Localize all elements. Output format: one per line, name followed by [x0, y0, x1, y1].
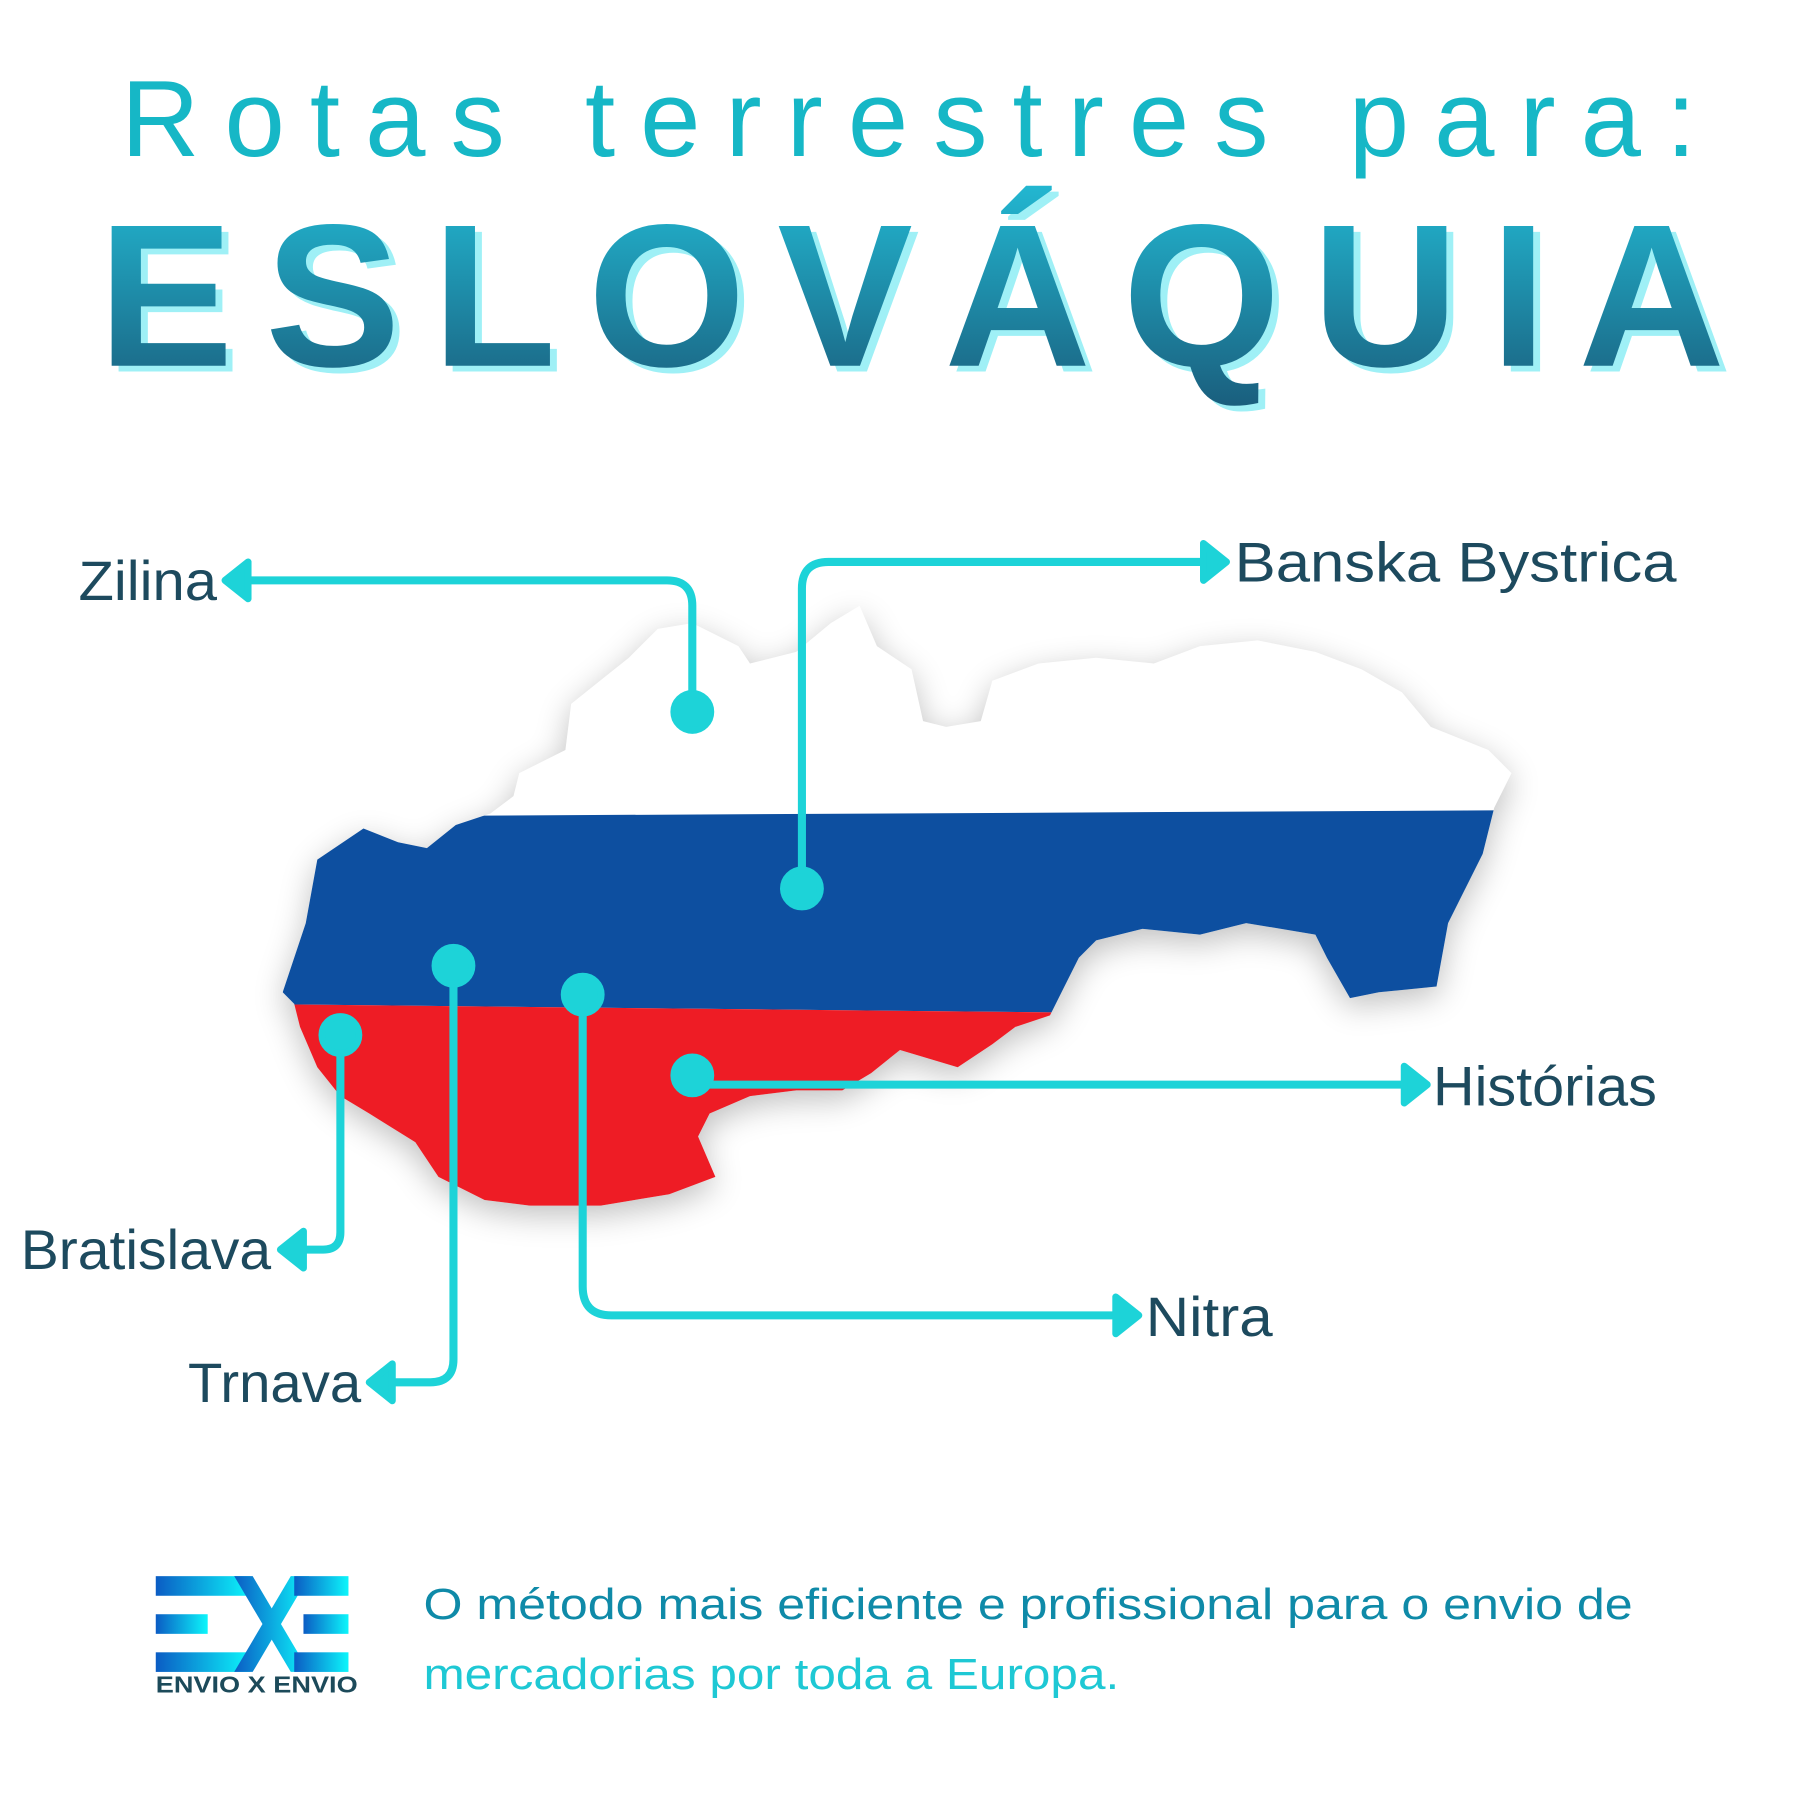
line: Banska Bystrica	[802, 562, 1206, 888]
labels: Nitra	[1146, 1286, 1273, 1348]
footer text	[423, 1580, 1633, 1699]
labels: Trnava	[188, 1352, 361, 1414]
labels: Zilina	[78, 550, 217, 612]
labels: Banska Bystrica	[1235, 532, 1677, 594]
footer text: O método mais eficiente e profissional para o envio de	[423, 1580, 1633, 1629]
labels	[21, 532, 1677, 1414]
logo: ENVIO X ENVIO	[156, 1672, 358, 1698]
labels: Bratislava	[21, 1219, 271, 1281]
line: Zilina	[248, 580, 692, 712]
line: Nitra	[583, 995, 1119, 1315]
labels: Histórias	[1433, 1055, 1657, 1117]
title line 1: Rotas terrestres para:	[121, 58, 1696, 179]
title main: ESLOVÁQUIA	[105, 189, 1732, 416]
footer text: mercadorias por toda a Europa.	[423, 1650, 1119, 1699]
title main: ESLOVÁQUIA	[98, 183, 1725, 410]
logo	[156, 1576, 358, 1698]
line: Trnava	[387, 966, 453, 1382]
line: Historias	[692, 1081, 1408, 1088]
map: Slovakia flag	[271, 608, 1522, 1232]
dots and arrowheads	[225, 543, 1427, 1401]
line: Bratislava	[300, 1035, 340, 1250]
